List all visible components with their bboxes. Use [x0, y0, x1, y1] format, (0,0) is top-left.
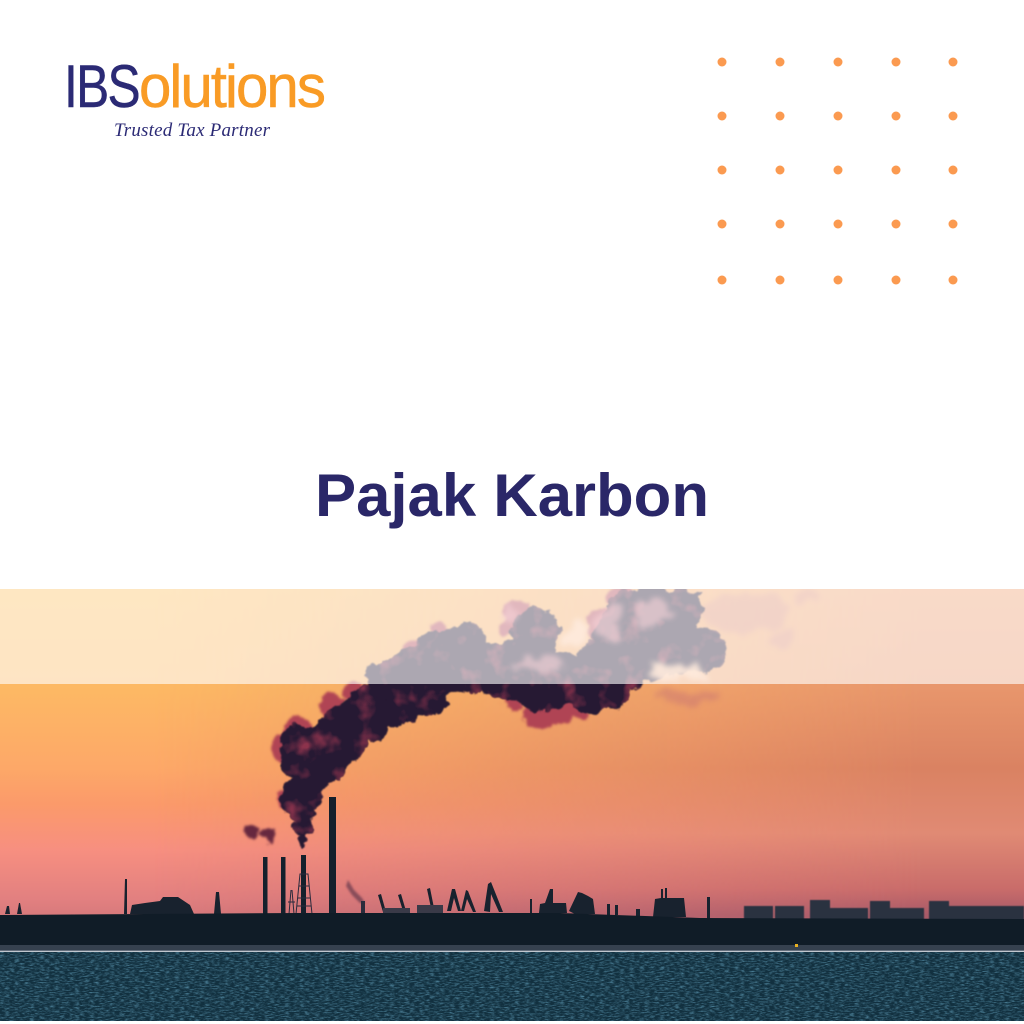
town buildings right [744, 900, 1024, 922]
faint wisps on the right [656, 599, 782, 708]
logo wordmark: IBSolutions [64, 53, 324, 120]
sea water [0, 952, 1024, 1021]
pale break in the cloud [567, 620, 710, 681]
chimneys and lattice towers [263, 797, 336, 915]
logo tagline: Trusted Tax Partner [114, 120, 271, 141]
shoreline [0, 945, 1024, 952]
small steam [346, 880, 365, 913]
industrial skyline left: cranes and buildings [5, 879, 710, 919]
plume red edge billows [273, 585, 635, 806]
logo: IBSolutions Trusted Tax Partner [64, 53, 324, 141]
photo: factory smoke at sunset [0, 585, 1024, 1021]
plume dark core billows [279, 586, 728, 850]
white translucent band over sky [0, 589, 1024, 684]
harbour light [795, 944, 798, 947]
small smoke puff on the left [243, 822, 276, 844]
sunset sky [0, 589, 1024, 919]
smoke plume [243, 585, 820, 850]
chimneys [263, 797, 336, 915]
lattice tower at chimney [288, 874, 312, 914]
plume light cloud patches [500, 600, 670, 674]
title: Pajak Karbon [315, 462, 709, 529]
decorative dot grid [718, 58, 958, 284]
dark land strip [0, 913, 1024, 948]
